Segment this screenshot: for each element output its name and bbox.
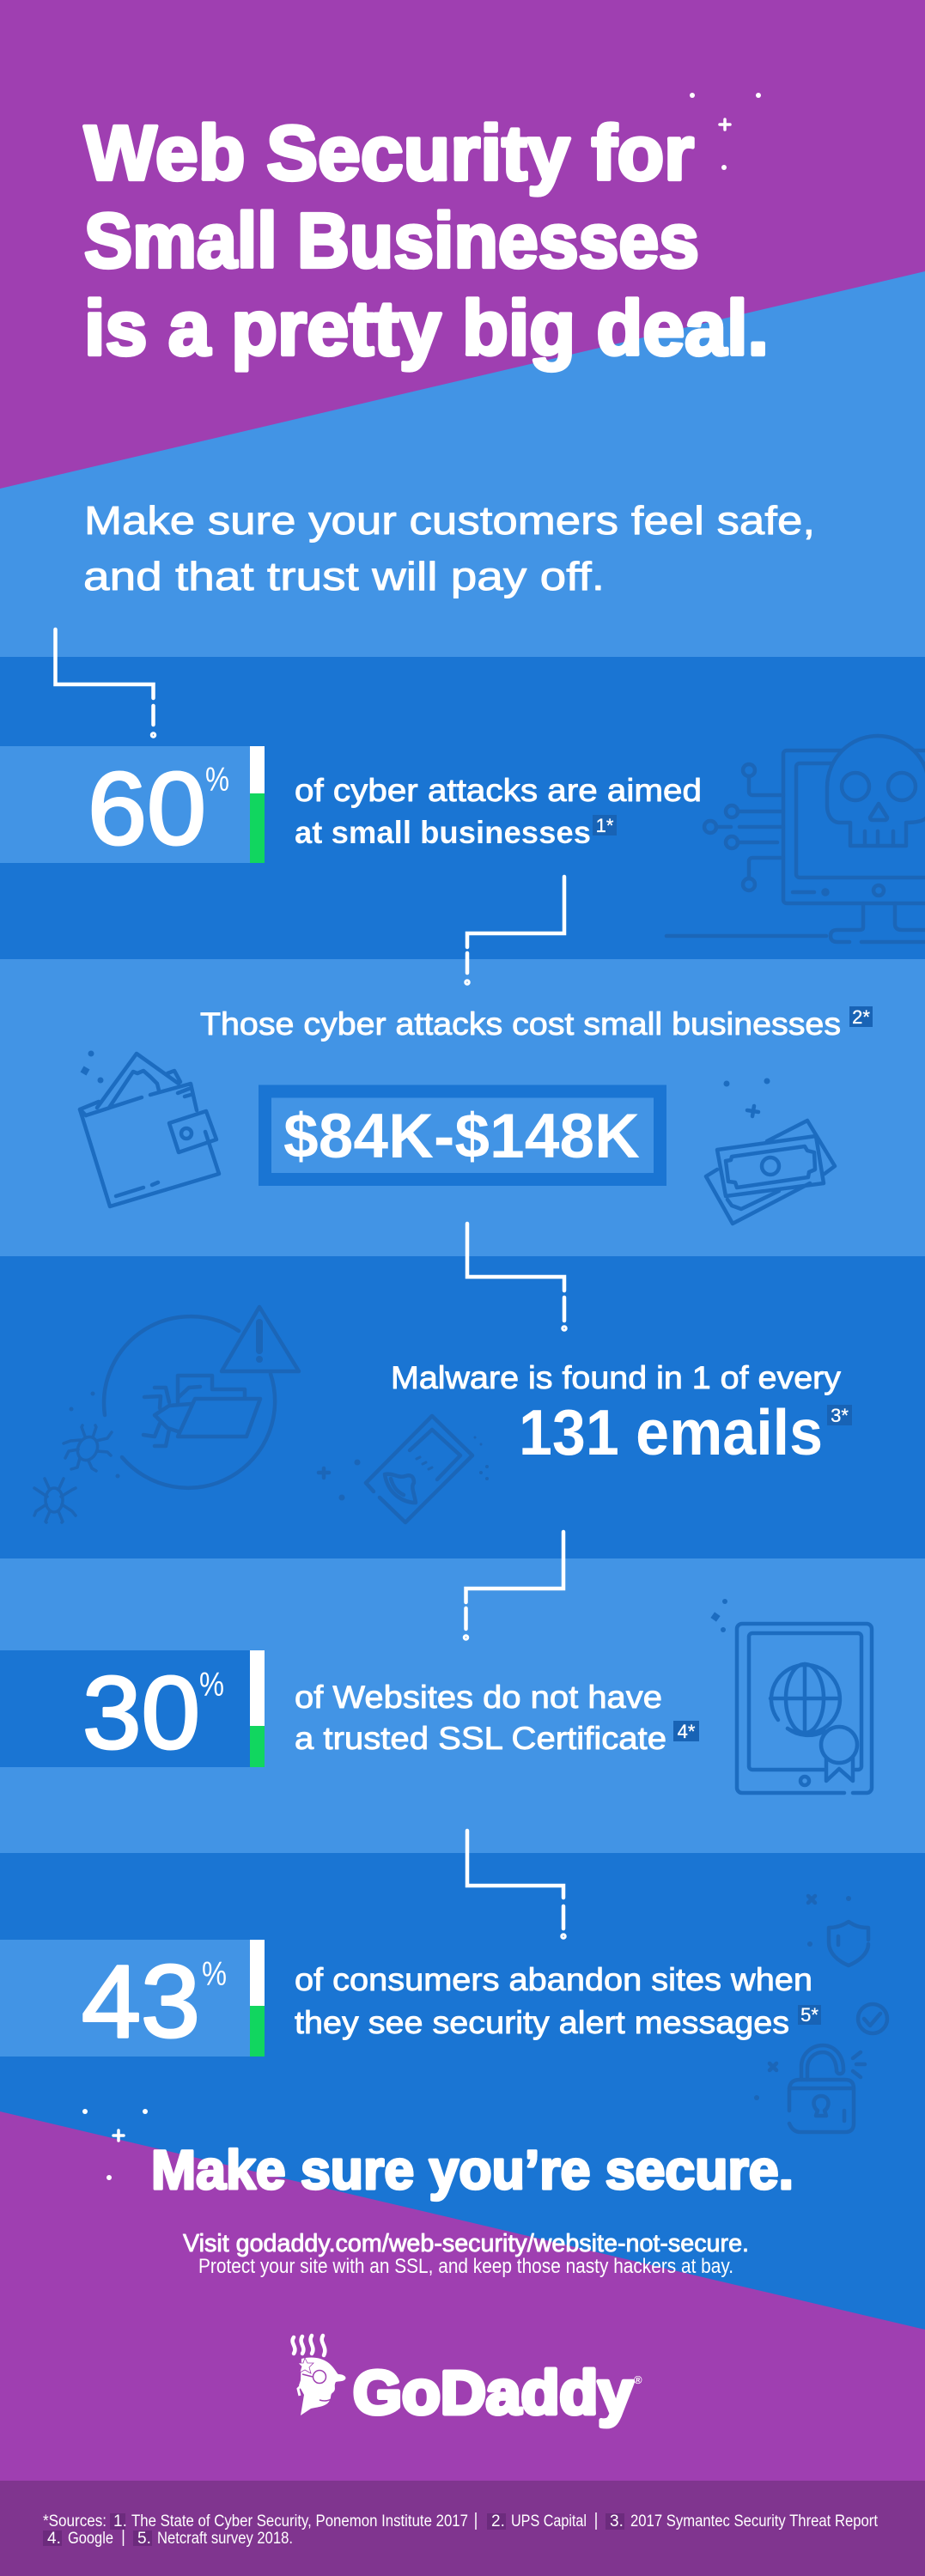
icon: banknotes: [706, 1078, 835, 1224]
arrow: connector 1: [55, 629, 155, 737]
description: at small businesses: [295, 815, 591, 850]
title: Web Security for: [84, 111, 694, 197]
call to action text: Visit godaddy.com/web-security/website-not-secure.: [183, 2230, 749, 2257]
description: they see security alert messages: [295, 2005, 789, 2040]
arrow: connector 5: [467, 1831, 565, 1937]
footnote marker: [673, 1721, 699, 1742]
sources footer: 5.: [137, 2530, 151, 2548]
bar background: [0, 1940, 250, 2057]
description: of cyber attacks are aimed: [295, 773, 702, 808]
description: a trusted SSL Certificate: [295, 1721, 666, 1756]
gauge: [250, 1940, 265, 2057]
sources footer: UPS Capital: [511, 2512, 587, 2530]
number: 43: [82, 1944, 200, 2059]
panel: purple header: [0, 0, 925, 489]
icon: mascot: [293, 2336, 346, 2415]
footnote marker: 3*: [831, 1405, 849, 1426]
malware statistic text: Malware is found in 1 of every: [391, 1360, 842, 1395]
arrow: connector 4: [465, 1532, 563, 1638]
closing headline: Make sure you’re secure.: [151, 2139, 794, 2201]
icon: monitor with skull: [666, 736, 925, 942]
panel: stat band 43 percent: [0, 1853, 925, 2576]
panel: stat band 60 percent: [0, 657, 925, 959]
malware statistic text: [391, 1360, 852, 1468]
subtitle: and that trust will pay off.: [83, 554, 605, 598]
percent sign: %: [199, 1667, 224, 1704]
subtitle: [83, 498, 815, 598]
bar background: [0, 1650, 250, 1767]
call to action text: Protect your site with an SSL, and keep those nasty hackers at bay.: [198, 2255, 733, 2278]
percent sign: %: [205, 762, 229, 799]
malware statistic text: 131 emails: [519, 1396, 823, 1468]
panel: 43 percent stat: [0, 1940, 821, 2059]
sources footer: *Sources:: [43, 2512, 106, 2530]
sources footer: Netcraft survey 2018.: [157, 2530, 293, 2548]
sources footer: 4.: [47, 2530, 61, 2548]
sources footer: Google: [68, 2530, 113, 2548]
arrow: connector 2: [466, 877, 564, 984]
description: of consumers abandon sites when: [295, 1962, 812, 1997]
icon: header sparkles: [690, 93, 761, 170]
panel: malware band: [0, 1256, 925, 1558]
number: 30: [82, 1656, 200, 1771]
icon: tilted phone: [319, 1416, 489, 1522]
title: Small Businesses: [84, 198, 699, 284]
call to action text: [183, 2230, 749, 2278]
percent sign: %: [202, 1956, 227, 1993]
panel: purple closing area: [0, 2111, 925, 2576]
registered mark: ®: [634, 2373, 642, 2386]
icon: malware folder with bugs: [34, 1307, 299, 1522]
cost lead-in text: Those cyber attacks cost small businesses: [200, 1006, 841, 1042]
logo: GoDaddy: [293, 2336, 642, 2427]
sources footer: 1.: [113, 2512, 127, 2530]
title: is a pretty big deal.: [84, 286, 769, 372]
gauge: [250, 1650, 265, 1767]
title: [84, 111, 769, 372]
gauge: [250, 746, 265, 863]
description: [295, 773, 702, 850]
subtitle: Make sure your customers feel safe,: [84, 498, 815, 543]
icon: tablet with globe and certificate: [710, 1599, 872, 1793]
footnote marker: 1*: [596, 815, 614, 836]
panel: 30 percent stat: [0, 1650, 699, 1771]
sources footer: 2017 Symantec Security Threat Report: [630, 2512, 879, 2530]
panel: 60 percent stat: [0, 746, 702, 866]
sources footer: 2.: [491, 2512, 505, 2530]
description: of Websites do not have: [295, 1680, 662, 1715]
arrow: connector 3: [467, 1224, 565, 1329]
description: [295, 1680, 666, 1756]
footnote marker: 4*: [678, 1721, 696, 1742]
icon: closing sparkles: [82, 2109, 148, 2180]
number: 60: [88, 751, 206, 866]
description: [295, 1962, 812, 2040]
footnote marker: 5*: [800, 2004, 819, 2026]
cost range box: $84K-$148K: [283, 1102, 640, 1171]
panel: sources footer background: [0, 2481, 925, 2576]
footnote marker: 2*: [852, 1006, 870, 1028]
bar background: [0, 746, 250, 863]
sources footer: [43, 2512, 879, 2548]
sources footer: 3.: [610, 2512, 624, 2530]
icon: shield, check and open lock: [754, 1896, 887, 2132]
wordmark: GoDaddy: [353, 2360, 634, 2427]
sources footer: The State of Cyber Security, Ponemon Institute 2017: [131, 2512, 468, 2530]
icon: wallet: [80, 1051, 219, 1206]
